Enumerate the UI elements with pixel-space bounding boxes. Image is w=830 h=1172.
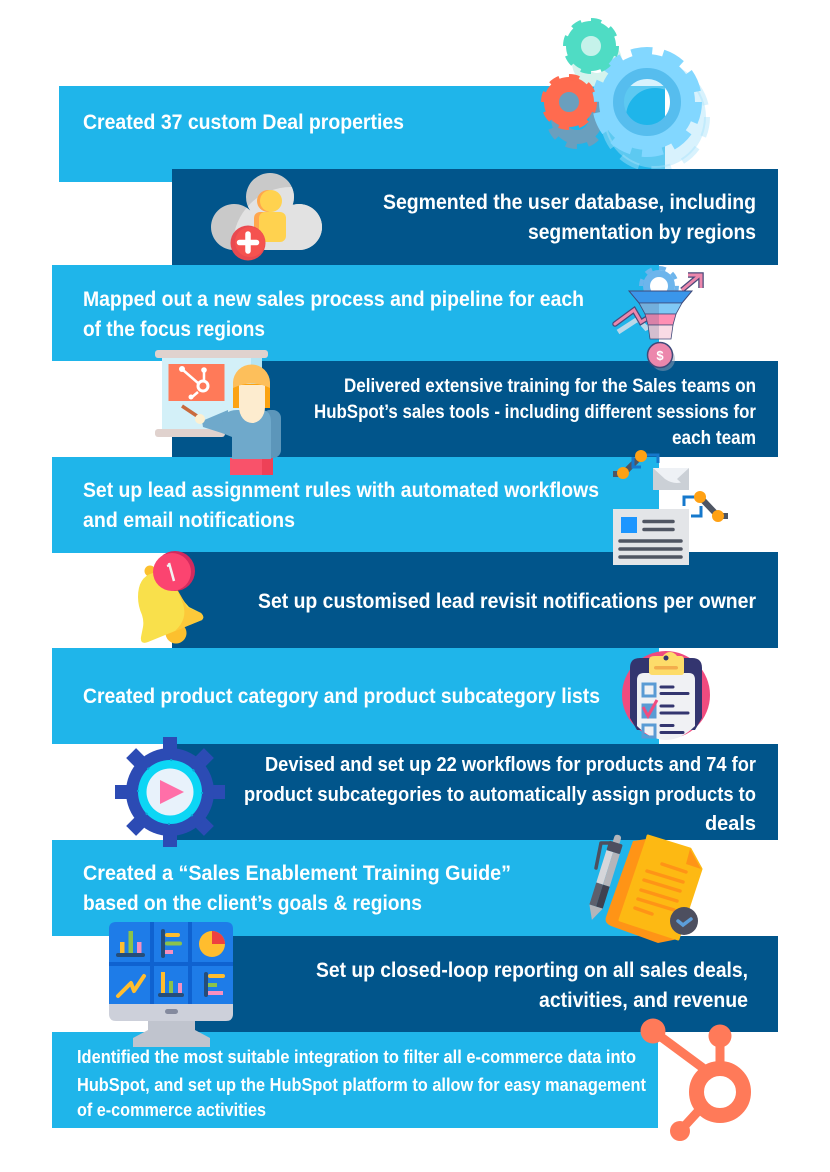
- text: product workflows: product subcategories to automatically assign products to: [244, 783, 756, 806]
- panel: sales process and pipeline: [52, 265, 659, 361]
- icon: automation arms and email: [613, 450, 728, 565]
- text: training guide: Created a “Sales Enablement Training Guide”: [83, 862, 511, 885]
- text: product category lists: Created product category and product subcategory lists: [83, 685, 600, 708]
- panel: lead revisit notifications: [172, 552, 778, 648]
- icon: product checklist: [622, 651, 710, 740]
- text: sales team training: Delivered extensive training for the Sales teams on: [344, 375, 756, 397]
- icon: presenter at board: [155, 350, 281, 475]
- text: sales team training: each team: [672, 427, 756, 449]
- text: training guide: based on the client’s goals & regions: [83, 892, 422, 915]
- panel: lead assignment rules: [52, 457, 659, 553]
- text: e-commerce integration: [77, 1046, 646, 1120]
- icon: sales funnel: $: [656, 348, 664, 363]
- panel: product category lists: [52, 648, 659, 744]
- text: e-commerce integration: of e-commerce activities: [77, 1099, 266, 1120]
- text: closed-loop reporting: activities, and revenue: [539, 989, 748, 1012]
- panel: custom deal properties: [59, 86, 665, 182]
- icon: sales funnel: [615, 268, 701, 371]
- text: product workflows: deals: [705, 812, 756, 835]
- panel: training guide: [52, 840, 659, 936]
- icon: hubspot on board: [168, 364, 224, 401]
- icon: notification bell: [138, 551, 203, 644]
- text: closed-loop reporting: [316, 959, 748, 1012]
- panel: e-commerce integration: [52, 1032, 658, 1128]
- icon: cloud user with plus: [211, 173, 322, 260]
- icon: hubspot logo: [640, 1018, 744, 1141]
- panel: product workflows: [172, 744, 778, 840]
- text: lead revisit notifications: Set up customised lead revisit notifications per owner: [258, 590, 756, 613]
- text: sales process and pipeline: Mapped out a new sales process and pipeline for each: [83, 288, 584, 311]
- panel: sales team training: [172, 361, 778, 457]
- text: segmented user database: Segmented the user database, including: [383, 191, 756, 214]
- text: sales process and pipeline: [83, 288, 584, 341]
- text: product workflows: Devised and set up 22 workflows for products and 74 for: [265, 753, 756, 776]
- text: lead assignment rules: [83, 479, 599, 532]
- text: sales team training: [314, 375, 756, 449]
- text: segmented user database: segmentation by regions: [528, 221, 756, 244]
- text: e-commerce integration: Identified the most suitable integration to filter all e-commerce data into: [77, 1046, 636, 1067]
- text: lead assignment rules: Set up lead assignment rules with automated workflows: [83, 479, 599, 502]
- text: segmented user database: [383, 191, 756, 244]
- icon: training guide document and pen: [585, 833, 701, 943]
- text: training guide: [83, 862, 511, 915]
- text: sales process and pipeline: of the focus regions: [83, 318, 265, 341]
- text: sales team training: HubSpot’s sales tools - including different sessions for: [314, 401, 756, 423]
- text: e-commerce integration: HubSpot, and set up the HubSpot platform to allow for easy management: [77, 1074, 646, 1095]
- text: custom deal properties: Created 37 custom Deal properties: [83, 111, 404, 134]
- icon: gears: [544, 21, 707, 169]
- text: product workflows: [244, 753, 756, 835]
- panel: segmented user database: [172, 169, 778, 265]
- text: lead assignment rules: and email notifications: [83, 509, 295, 532]
- text: closed-loop reporting: Set up closed-loop reporting on all sales deals,: [316, 959, 748, 982]
- panel: closed-loop reporting: [172, 936, 778, 1032]
- icon: play gear: [115, 737, 225, 847]
- icon: analytics monitor: [109, 922, 233, 1047]
